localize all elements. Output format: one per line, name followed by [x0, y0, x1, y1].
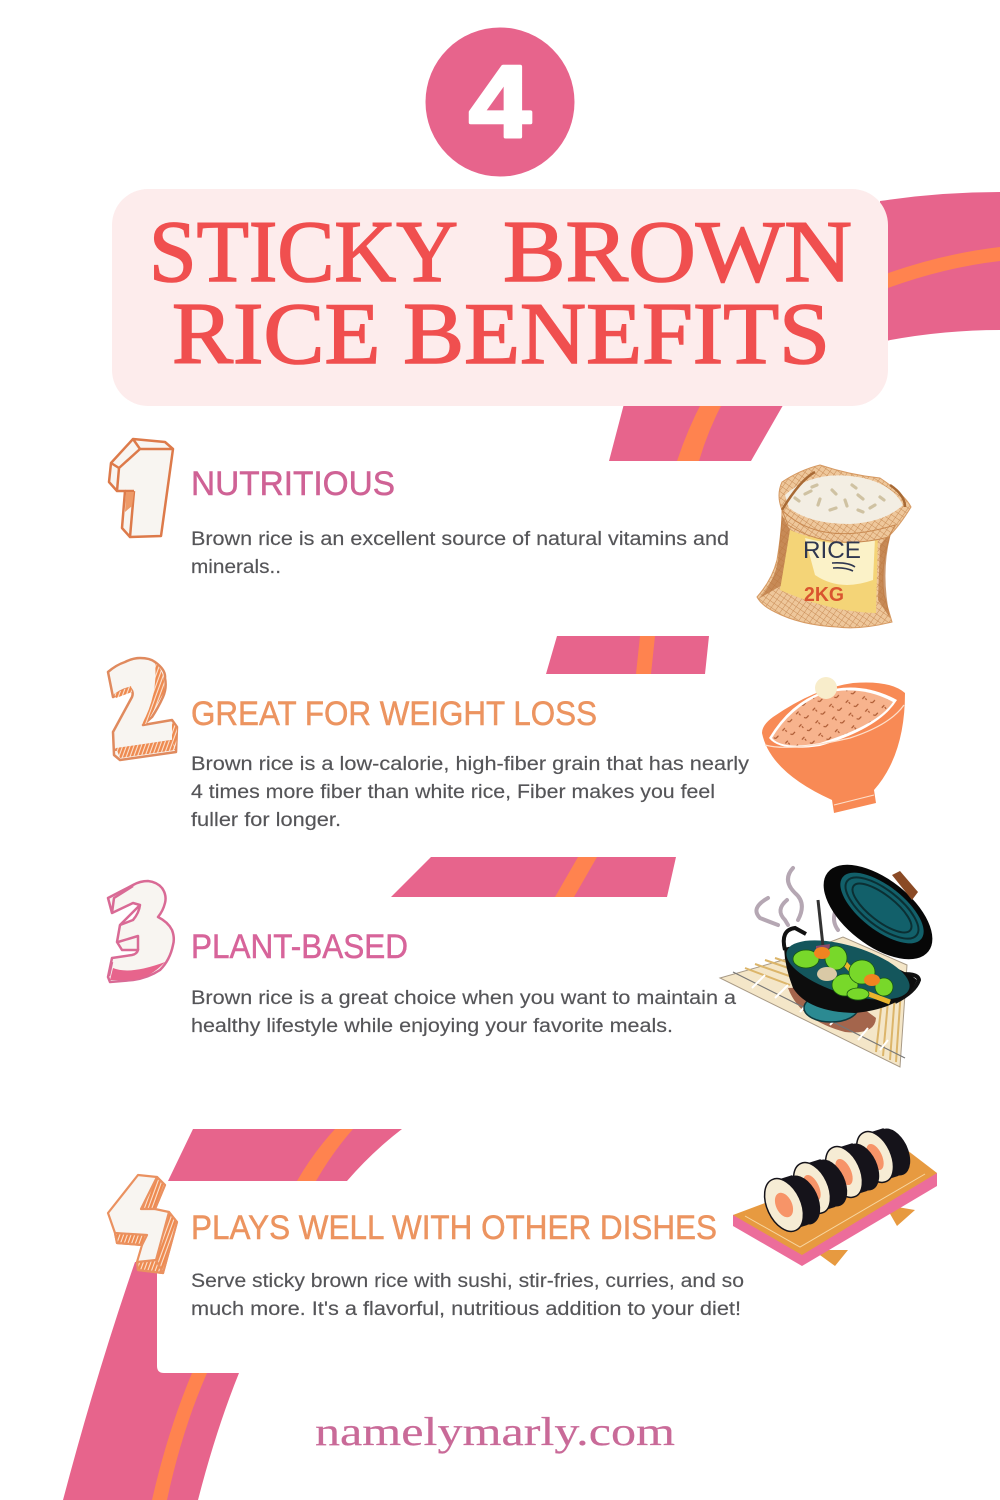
- badge: number 4: 4: [469, 45, 531, 159]
- body text: [191, 988, 736, 1037]
- section 3: plant-based: [108, 847, 949, 1067]
- body text: much more. It's a flavorful, nutritious addition to your diet!: [191, 1299, 741, 1320]
- illustration: sushi rolls on board: [733, 1123, 937, 1266]
- illustration: wok on bamboo mat: [720, 847, 949, 1067]
- ribbon: bottom left: [63, 1262, 239, 1500]
- section 2: weight loss: [108, 658, 905, 831]
- title text: BROWN: [503, 204, 852, 301]
- ribbon: below title: [609, 400, 786, 461]
- ribbon: section 2: [546, 636, 709, 674]
- heading: GREAT FOR WEIGHT LOSS: [191, 695, 597, 733]
- body text: Brown rice is a low-calorie, high-fiber grain that has nearly: [191, 754, 750, 775]
- heading: NUTRITIOUS: [191, 465, 395, 503]
- heading: PLANT-BASED: [191, 928, 408, 966]
- body text: healthy lifestyle while enjoying your favorite meals.: [191, 1016, 673, 1037]
- footer website: namelymarly.com: [315, 1409, 675, 1454]
- badge: number 4: [426, 28, 574, 176]
- illustration: rice bag: RICE: [803, 537, 861, 564]
- body text: [191, 529, 729, 578]
- body text: Brown rice is an excellent source of natural vitamins and: [191, 529, 729, 550]
- icon: numeral 2: [108, 658, 177, 760]
- title text: STICKY: [149, 204, 458, 301]
- body text: Serve sticky brown rice with sushi, stir-fries, curries, and so: [191, 1271, 744, 1292]
- body text: fuller for longer.: [191, 810, 341, 831]
- ribbon: top right: [880, 192, 1000, 342]
- body text: minerals..: [191, 557, 281, 578]
- body text: 4 times more fiber than white rice, Fiber makes you feel: [191, 782, 715, 803]
- icon: numeral 3: [108, 881, 174, 982]
- section 1: nutritious: [109, 439, 911, 628]
- body text: Brown rice is a great choice when you want to maintain a: [191, 988, 736, 1009]
- heading: PLAYS WELL WITH OTHER DISHES: [191, 1209, 717, 1247]
- ribbon: section 3: [391, 857, 676, 897]
- icon: numeral 1: [109, 439, 173, 537]
- illustration: bowl of rice: [762, 677, 905, 813]
- body text: [191, 754, 750, 831]
- illustration: rice bag: 2KG: [804, 584, 844, 606]
- title text: RICE BENEFITS: [172, 286, 830, 383]
- title banner: [112, 189, 888, 406]
- illustration: rice bag: [757, 465, 911, 628]
- icon: numeral 4: [108, 1175, 177, 1273]
- body text: [191, 1271, 744, 1320]
- title text: [149, 204, 852, 383]
- section 4: other dishes: [108, 1123, 937, 1320]
- ribbon: section 4 top: [168, 1129, 402, 1181]
